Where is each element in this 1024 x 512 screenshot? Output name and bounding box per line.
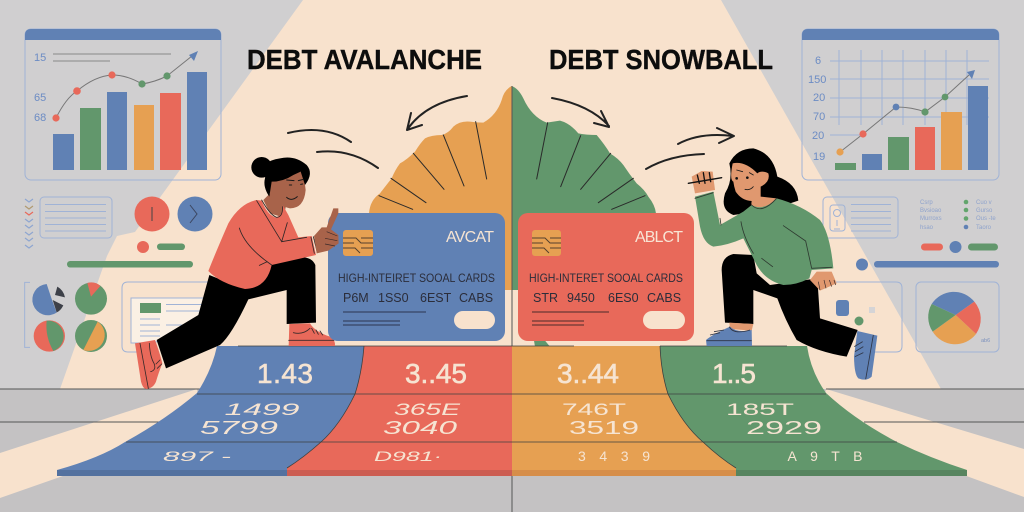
motion lines left bbox=[288, 130, 378, 168]
panel: left bar chart: 15 bbox=[34, 52, 46, 64]
panel: right bar chart: 150 bbox=[808, 74, 826, 86]
chip bbox=[343, 230, 373, 256]
step: green bbox=[660, 346, 967, 476]
step: red: 3..45 bbox=[405, 358, 467, 389]
right legend: Taoro bbox=[976, 225, 992, 231]
step: orange: 3..44 bbox=[557, 358, 619, 389]
front shoe bbox=[289, 323, 335, 346]
neck and face bbox=[731, 163, 777, 213]
right legend: Csrp bbox=[920, 200, 933, 206]
sweater folds bbox=[239, 200, 317, 265]
panel: right bar chart: 6 bbox=[815, 55, 821, 67]
lower hand bbox=[810, 272, 837, 291]
right legend: hsao bbox=[920, 225, 934, 231]
right text box with icon bbox=[823, 197, 898, 238]
front shoe bbox=[706, 327, 752, 346]
card: red: 6ES0 bbox=[608, 291, 639, 305]
panel: right bar chart: 70 bbox=[813, 111, 825, 123]
step: green: A9TB bbox=[788, 448, 862, 464]
arrow: snowball bbox=[552, 98, 609, 127]
motion arrow right bbox=[646, 128, 734, 169]
left status circles bbox=[67, 196, 212, 268]
panel: left bar chart: 68 bbox=[34, 112, 46, 124]
step: green: 1..5 bbox=[712, 358, 756, 389]
right icon panel bbox=[820, 282, 902, 352]
step: blue: 1499 bbox=[224, 400, 301, 419]
center divider bbox=[511, 86, 513, 512]
step: red: D981· bbox=[374, 448, 442, 464]
step: blue: 1.43 bbox=[257, 358, 313, 389]
pants bbox=[157, 257, 316, 368]
card: red: HIGH-INTERET SOOAL CARDS bbox=[529, 271, 683, 285]
card: blue bbox=[328, 213, 505, 341]
panel: left bar chart: 65 bbox=[34, 92, 46, 104]
step: orange: 3519 bbox=[569, 418, 639, 438]
right legend: Ous -te bbox=[976, 216, 996, 222]
title: debt avalanche: DEBT AVALANCHE bbox=[247, 44, 482, 75]
left chevron list bbox=[25, 199, 33, 248]
left text box bbox=[40, 197, 112, 238]
face bbox=[268, 172, 306, 208]
panel: right bar chart bbox=[802, 29, 999, 180]
right legend bbox=[920, 200, 996, 231]
card: blue: CABS bbox=[459, 291, 493, 305]
card: red: ABLCT bbox=[635, 229, 683, 246]
right legend: Bvsioao bbox=[920, 208, 942, 214]
right pie panel bbox=[916, 282, 999, 352]
sweater bbox=[695, 192, 833, 285]
back shoe details bbox=[854, 335, 873, 379]
card: red: STR bbox=[533, 291, 558, 305]
step: red bbox=[287, 346, 512, 476]
right status bars bbox=[856, 241, 999, 270]
ankle bbox=[729, 323, 753, 331]
shoe details bbox=[140, 328, 334, 388]
step: orange bbox=[512, 346, 736, 476]
right figure bbox=[688, 148, 877, 380]
orange debt mountain bbox=[369, 86, 512, 290]
step: blue bbox=[57, 346, 364, 476]
chip bbox=[532, 230, 561, 256]
eyes and smile bbox=[287, 179, 303, 199]
step rules bbox=[126, 346, 897, 468]
title: debt snowball: DEBT SNOWBALL bbox=[549, 44, 773, 75]
neck bbox=[263, 190, 287, 217]
green debt mountain bbox=[512, 86, 656, 347]
card: blue: 6EST bbox=[420, 291, 452, 305]
pants bbox=[722, 254, 858, 357]
step: blue: 897 - bbox=[163, 448, 232, 464]
face details bbox=[737, 170, 753, 190]
left pie charts bbox=[25, 282, 107, 352]
raised hand with pen bbox=[692, 171, 715, 193]
right pie panel: ab6 bbox=[981, 338, 990, 344]
card: blue: AVCAT bbox=[446, 229, 494, 246]
back shoe bbox=[135, 340, 162, 389]
step: green: 185T bbox=[726, 400, 794, 419]
step: red: 365E bbox=[394, 400, 461, 419]
right legend: Cuo v bbox=[976, 200, 992, 206]
card: red bbox=[518, 213, 694, 341]
hair bbox=[251, 157, 310, 197]
sweater folds bbox=[695, 193, 832, 268]
step: green: 2929 bbox=[746, 418, 822, 438]
spotlight beam bbox=[60, 0, 941, 389]
left figure bbox=[135, 157, 335, 389]
step: orange: 746T bbox=[562, 400, 626, 419]
left hand over card bbox=[314, 208, 339, 253]
panel: right bar chart: 19 bbox=[813, 151, 825, 163]
card: red: CABS bbox=[647, 291, 681, 305]
hair bbox=[724, 148, 798, 215]
floor bbox=[0, 389, 1024, 512]
card: blue: 1SS0 bbox=[378, 291, 409, 305]
panel: right bar chart: 20 bbox=[813, 92, 825, 104]
arrow: avalanche bbox=[407, 96, 467, 130]
right legend: Murroxs bbox=[920, 216, 942, 222]
step: blue: 5799 bbox=[200, 418, 278, 438]
step: red: 3040 bbox=[383, 418, 457, 438]
left document panel bbox=[122, 282, 220, 352]
back shoe bbox=[854, 331, 877, 380]
card: red: 9450 bbox=[567, 291, 595, 305]
panel: right bar chart: 20 bbox=[812, 130, 824, 142]
card: blue: P6M bbox=[343, 291, 369, 305]
step: orange: 3439 bbox=[578, 448, 650, 464]
right legend: Gurso bbox=[976, 208, 993, 214]
card: blue: HIGH-INTEIRET SOOAL CARDS bbox=[338, 271, 495, 285]
sweater bbox=[208, 200, 316, 289]
panel: left bar chart bbox=[25, 29, 221, 180]
